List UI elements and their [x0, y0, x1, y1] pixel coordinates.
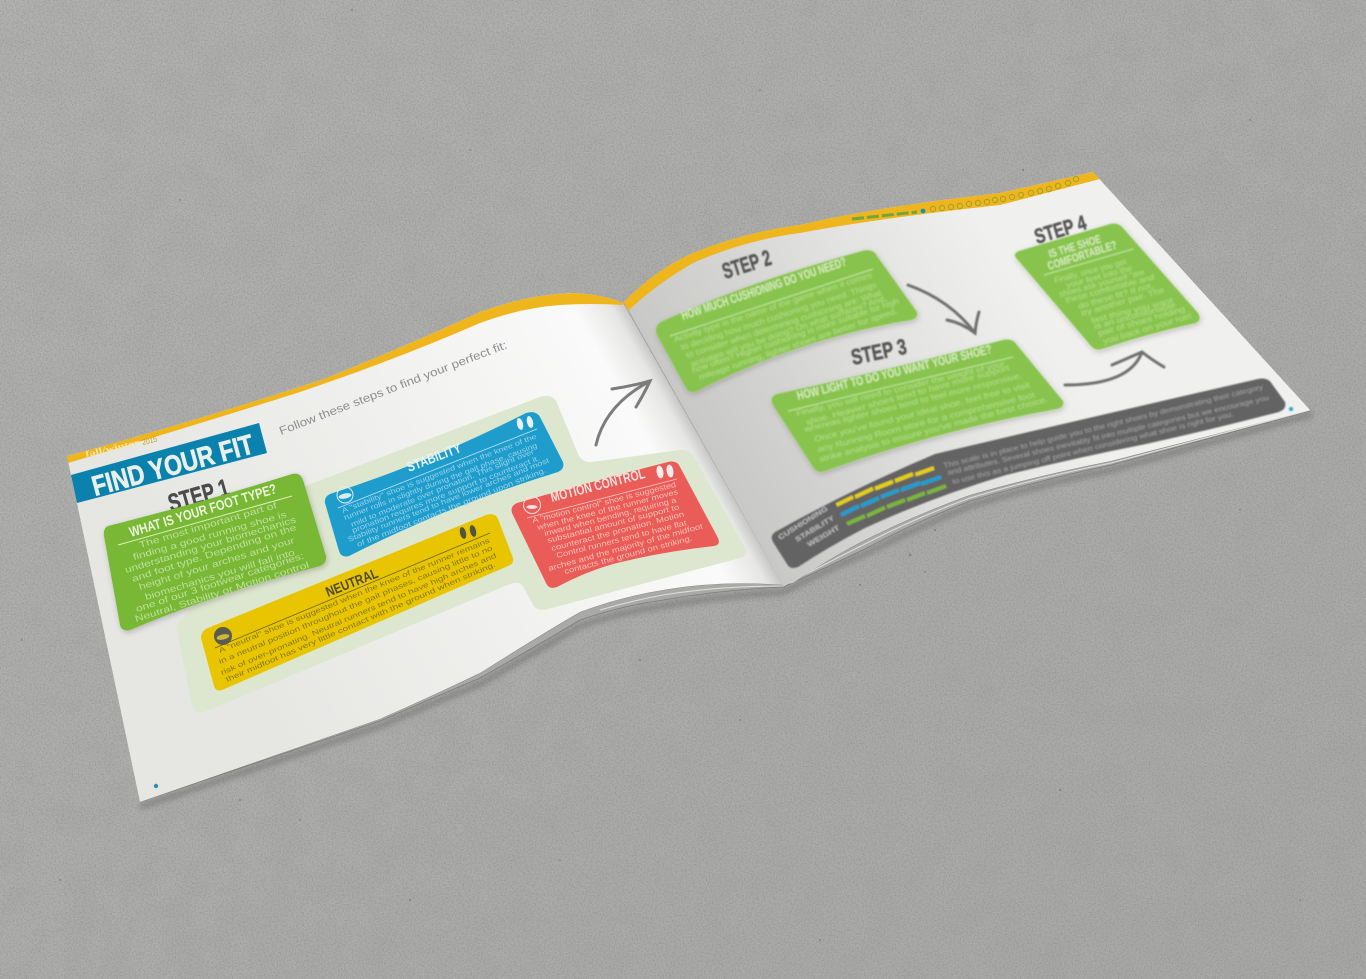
panel: step 1 foot type [104, 474, 326, 630]
panel: stability: runner rolls in slightly during the gait phase, causing [343, 441, 538, 522]
blurred right-page content [656, 211, 1293, 568]
panel: motion control: inward when bending, requiring a [543, 495, 678, 538]
panel: step 2 cushioning: activities will you be doing? On what surfaces? And, [690, 294, 888, 369]
page sheet: left [67, 293, 783, 802]
panel: stability [325, 412, 563, 556]
panel: step 4 comfort [1015, 224, 1200, 350]
panel: step 1 foot type: one of our 3 footwear categories: [135, 551, 305, 614]
panel: step 1 foot type: biomechanics you will fall into [144, 547, 296, 602]
right page [624, 172, 1310, 585]
panel: step 1 foot type: Neutral, Stability or Motion control [134, 560, 310, 624]
panel: step 4 comfort: these comfortable and [1064, 272, 1155, 305]
scale labels [777, 505, 842, 549]
page number: left [154, 784, 158, 788]
panel: motion control: contacts the ground on striking. [563, 534, 693, 576]
panel: step 2 cushioning: HOW MUCH CUSHIONING DO YOU NEED? [680, 255, 848, 323]
title banner: FIND YOUR FIT [88, 429, 257, 502]
panel: neutral: NEUTRAL [323, 565, 381, 600]
arrow: to step 2 [596, 381, 650, 445]
arrow: to step 3 [908, 285, 979, 333]
step 1 heading: STEP 1 [165, 474, 232, 518]
panel: motion control: counteract the pronation. Motion [550, 509, 685, 553]
panel: motion control [512, 462, 719, 588]
panel: rating scale legend [772, 379, 1285, 568]
panel: motion control: when the knee of the runner moves [535, 487, 679, 532]
panel: step 4 comfort: last thing you want [1090, 296, 1175, 325]
panel: step 2 cushioning: how often? Higher cushioning is more suitable for high [691, 296, 900, 375]
scale description: This scale is in place to help guide you to the right shoes by demonstrating their category [943, 384, 1264, 470]
panel: step 3 weight: Finally, you will need to consider the weight of your [795, 359, 1006, 418]
page number: right [1289, 407, 1293, 411]
panel: stability: pronation requires more support to counteract it. [350, 453, 541, 535]
panel: stability: of the midfoot contacts the ground upon striking. [355, 465, 547, 549]
panel: stability: Stability runners tend to have lower arches and most [346, 456, 550, 544]
panel: step 2 cushioning: to consider when determining cushioning are: What [685, 288, 884, 360]
panel: step 3 weight [772, 340, 1063, 472]
panel: step 3 weight: whereas lighter shoes tend to feel more responsive. [802, 371, 1023, 434]
icon: shoe (stability) [337, 487, 353, 503]
page stack [140, 410, 1310, 802]
header label: fall/winter [84, 434, 158, 459]
icon: shoe (motion control) [524, 496, 540, 514]
step 2 heading: STEP 2 [719, 245, 774, 284]
step 3 heading: STEP 3 [849, 334, 909, 370]
icon: feet (stability) [516, 415, 534, 431]
header label: fall/winter: 2015 [141, 434, 158, 447]
panel: step 4 comfort: Finally, once you get [1053, 257, 1128, 285]
panel: neutral: their midfoot has very little contact with the ground when striking. [224, 560, 497, 684]
panel: motion control: MOTION CONTROL [549, 465, 647, 505]
panel: step 3 weight: any Running Room store for a comprehensive foot [816, 390, 1037, 454]
panel: stability: STABILITY [404, 439, 464, 475]
panel: neutral: risk of over-pronating. Neutral runners tend to have high arches and [219, 551, 498, 677]
icon: shoe (neutral) [214, 627, 232, 645]
scale bars: cushioning [836, 468, 934, 505]
panel: step 4 comfort: is an uncomfortable [1093, 300, 1177, 331]
scale description: to use this as a jumping off point when considering what shoe is right for you. [952, 411, 1234, 486]
panel: step 3 weight: shoe. Heavier shoes tend to have more support [805, 363, 1011, 427]
panel: step 3 weight: strike analysis to ensure you've made the best choice. [818, 395, 1049, 464]
panel: stability: A "stability" shoe is suggested when the knee of the [340, 432, 538, 515]
panel: step 2 cushioning: to deciding how much cushioning you need. Things [680, 280, 878, 352]
scale labels: STABILITY [794, 515, 836, 544]
header band: left [67, 293, 623, 463]
panel: step 1 foot type: WHAT IS YOUR FOOT TYPE? [127, 480, 278, 540]
panel: step 3 weight: Once you've found your ideal shoe, feel free to visit [813, 380, 1032, 444]
step 4 heading: STEP 4 [1032, 211, 1089, 249]
scale labels: WEIGHT [806, 524, 842, 549]
icon: feet (motion control) [656, 464, 674, 479]
icon: feet (neutral) [459, 524, 477, 540]
panel: neutral: in a neutral position throughout the gait phases, causing little to no [217, 543, 494, 666]
header label: fall/winter: fall/winter [84, 437, 140, 459]
panel: step 1 foot type: understanding your biomechanics [124, 514, 298, 575]
panel: motion control: substantial amount of support to [546, 502, 680, 545]
panel: step 4 comfort: pair of shoes holding [1097, 304, 1186, 338]
scale description [943, 384, 1270, 486]
panel: step 4 comfort: shoes ask yourself "are [1058, 267, 1146, 299]
arrow: to step 4 [1065, 352, 1164, 385]
panel: step 2 cushioning: mileage running, lighter shoes are better for speed. [698, 306, 899, 382]
header band: right [624, 172, 1100, 311]
scale description: and attributes. Several shoes inevitably fit into multiple categories but we encourage you [947, 395, 1270, 477]
panel: step 4 comfort: try another pair. The [1080, 285, 1166, 318]
panel: step 3 weight: HOW LIGHT TO DO YOU WANT YOUR SHOE? [795, 342, 993, 403]
scale bars: weight [847, 486, 946, 524]
intro text: Follow these steps to find your perfect fit: [278, 340, 509, 438]
book shadow [140, 414, 1312, 807]
panel: neutral [201, 514, 513, 690]
panel: step 4 comfort: do these fit? If not, [1077, 281, 1155, 311]
panel: step 1 foot type: The most important part of [138, 500, 278, 550]
backing panel: shoe categories [176, 396, 746, 713]
panel: step 4 comfort: your feet into the [1065, 263, 1134, 290]
panel: step 4 comfort: IS THE SHOE [1047, 234, 1103, 261]
panel: step 1 foot type: and foot type. Depending on the [131, 522, 298, 584]
scale bars: stability [841, 477, 941, 515]
scale labels: CUSHIONING [777, 505, 830, 542]
panel: step 4 comfort: you back on your run! [1102, 311, 1193, 346]
panel: step 4 comfort: COMFORTABLE? [1046, 240, 1119, 273]
panel: step 1 foot type: height of your arches and your [138, 535, 296, 592]
panel: stability: mild to moderate over pronation. This slight over [349, 446, 536, 529]
panel: step 1 foot type: finding a good running shoe is [132, 509, 288, 562]
header dots [852, 176, 1079, 219]
panel: motion control: Control runners tend to have flat [555, 518, 688, 560]
left page [67, 293, 783, 802]
panel: motion control: arches and the majority of the midfoot [547, 521, 705, 573]
panel: step 2 cushioning: Activity type is the name of the game when it comes [673, 270, 873, 344]
page sheet: right [624, 172, 1310, 585]
panel: step 2 cushioning [656, 250, 917, 392]
panel: motion control: A "motion control" shoe is suggested [531, 480, 677, 525]
panel: neutral: A "neutral" shoe is suggested when the knee of the runner remains [217, 536, 491, 655]
